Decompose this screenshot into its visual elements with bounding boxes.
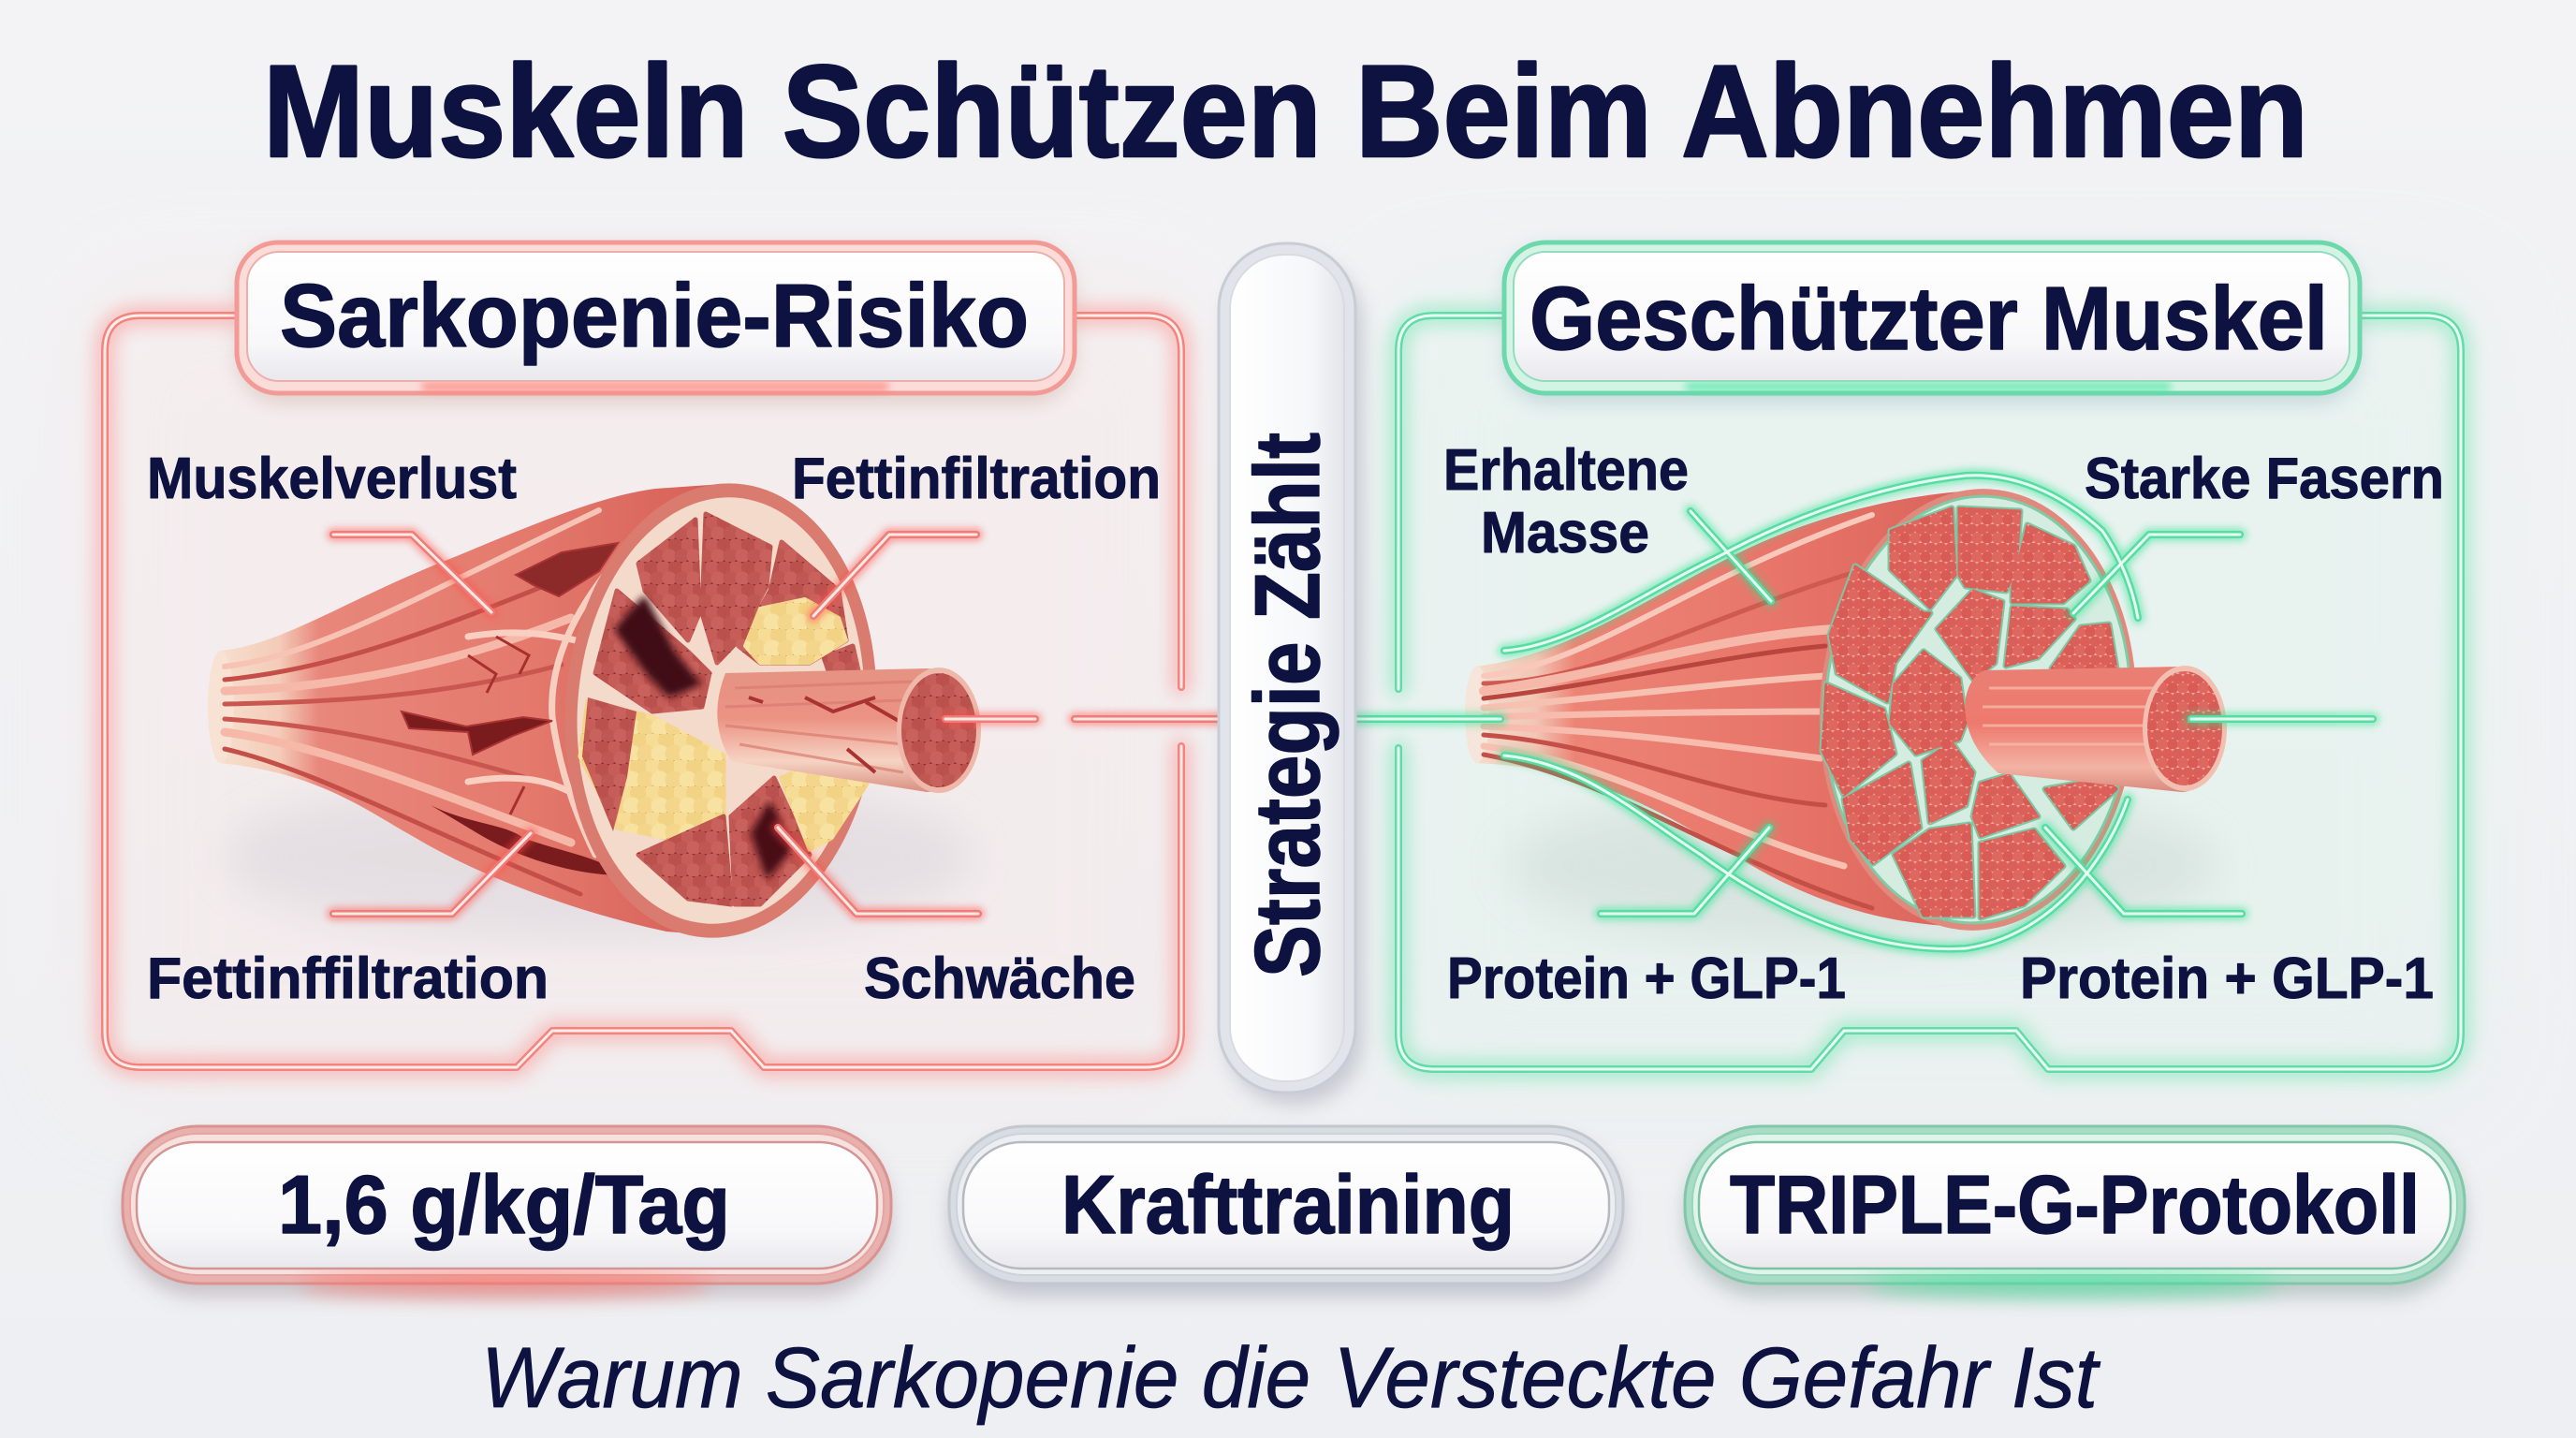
label: Fettinfiltration: Fettinfiltration bbox=[792, 447, 1161, 511]
label: Erhaltene Masse bbox=[1443, 438, 1689, 565]
callouts: left muscle bbox=[333, 535, 1219, 914]
label: Muskelverlust: Muskelverlust bbox=[147, 447, 517, 511]
header pill: Geschützter Muskel bbox=[1504, 242, 2360, 404]
label: Fettinffiltration: Fettinffiltration bbox=[147, 946, 549, 1011]
label: Erhaltene Masse: Masse bbox=[1481, 501, 1649, 565]
pill: TRIPLE-G-Protokoll bbox=[1685, 1126, 2465, 1298]
pill: Krafttraining: Krafttraining bbox=[1061, 1158, 1515, 1251]
subtitle: Warum Sarkopenie die Versteckte Gefahr Ist bbox=[481, 1330, 2100, 1426]
label: Protein + GLP-1 right: Protein + GLP-1 bbox=[2020, 946, 2434, 1011]
label: Schwäche: Schwäche bbox=[864, 946, 1135, 1011]
title: Muskeln Schützen Beim Abnehmen bbox=[263, 37, 2308, 184]
label: Protein + GLP-1 left: Protein + GLP-1 bbox=[1447, 946, 1846, 1011]
illustration: healthy muscle bbox=[1465, 480, 2227, 946]
pill: 1,6 g/kg/Tag bbox=[123, 1126, 891, 1298]
pill: 1,6 g/kg/Tag: 1,6 g/kg/Tag bbox=[278, 1158, 730, 1251]
label: Starke Fasern: Starke Fasern bbox=[2085, 447, 2444, 511]
label: Erhaltene Masse: Erhaltene bbox=[1443, 438, 1689, 503]
background tint: red panel bbox=[84, 281, 1198, 1095]
panel: Geschützter Muskel bbox=[1355, 242, 2461, 1069]
illustration: damaged muscle bbox=[208, 473, 981, 948]
center pill: Strategie Zählt: Strategie Zählt bbox=[1236, 433, 1339, 977]
header pill: Geschützter Muskel: Geschützter Muskel bbox=[1530, 269, 2328, 369]
header pill: Sarkopenie-Risiko: Sarkopenie-Risiko bbox=[280, 266, 1029, 366]
panel frame bbox=[105, 315, 1181, 1067]
panel frame bbox=[1398, 315, 2461, 1069]
center pill: Strategie Zählt bbox=[1219, 243, 1363, 1105]
panel: Sarkopenie-Risiko bbox=[105, 242, 1219, 1067]
callouts and contour: right muscle bbox=[1355, 476, 2373, 949]
pill: Krafttraining bbox=[949, 1126, 1623, 1297]
background tint: green panel bbox=[1385, 281, 2481, 1095]
header pill: Sarkopenie-Risiko bbox=[237, 242, 1075, 404]
pill: TRIPLE-G-Protokoll: TRIPLE-G-Protokoll bbox=[1730, 1158, 2420, 1251]
